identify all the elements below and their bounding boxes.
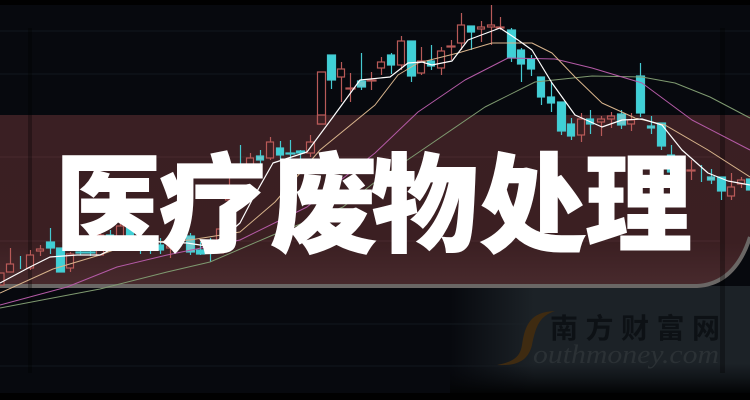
title: 废 bbox=[270, 146, 377, 266]
candlestick chart bbox=[0, 5, 750, 285]
watermark glow bbox=[0, 286, 750, 400]
watermark: southmoney logo bbox=[497, 311, 728, 369]
panel: title band bbox=[0, 115, 750, 286]
MA5 white line bbox=[0, 28, 750, 283]
title: 处 bbox=[479, 146, 586, 266]
title: 疗 bbox=[159, 146, 266, 266]
title bbox=[55, 146, 692, 266]
MA10 tan line bbox=[0, 43, 750, 293]
watermark Chinese name: 南方财富网 bbox=[550, 312, 728, 344]
rising candles bbox=[0, 5, 744, 285]
watermark domain: outhmoney.com bbox=[533, 340, 719, 369]
title: 医 bbox=[55, 146, 162, 266]
falling candles bbox=[20, 26, 750, 272]
title: 物 bbox=[371, 146, 478, 266]
title: 理 bbox=[585, 146, 692, 266]
logo S mark bbox=[497, 311, 555, 365]
MA20 magenta line bbox=[0, 58, 750, 305]
MA30 green line bbox=[0, 76, 750, 308]
moving average lines bbox=[0, 28, 750, 308]
